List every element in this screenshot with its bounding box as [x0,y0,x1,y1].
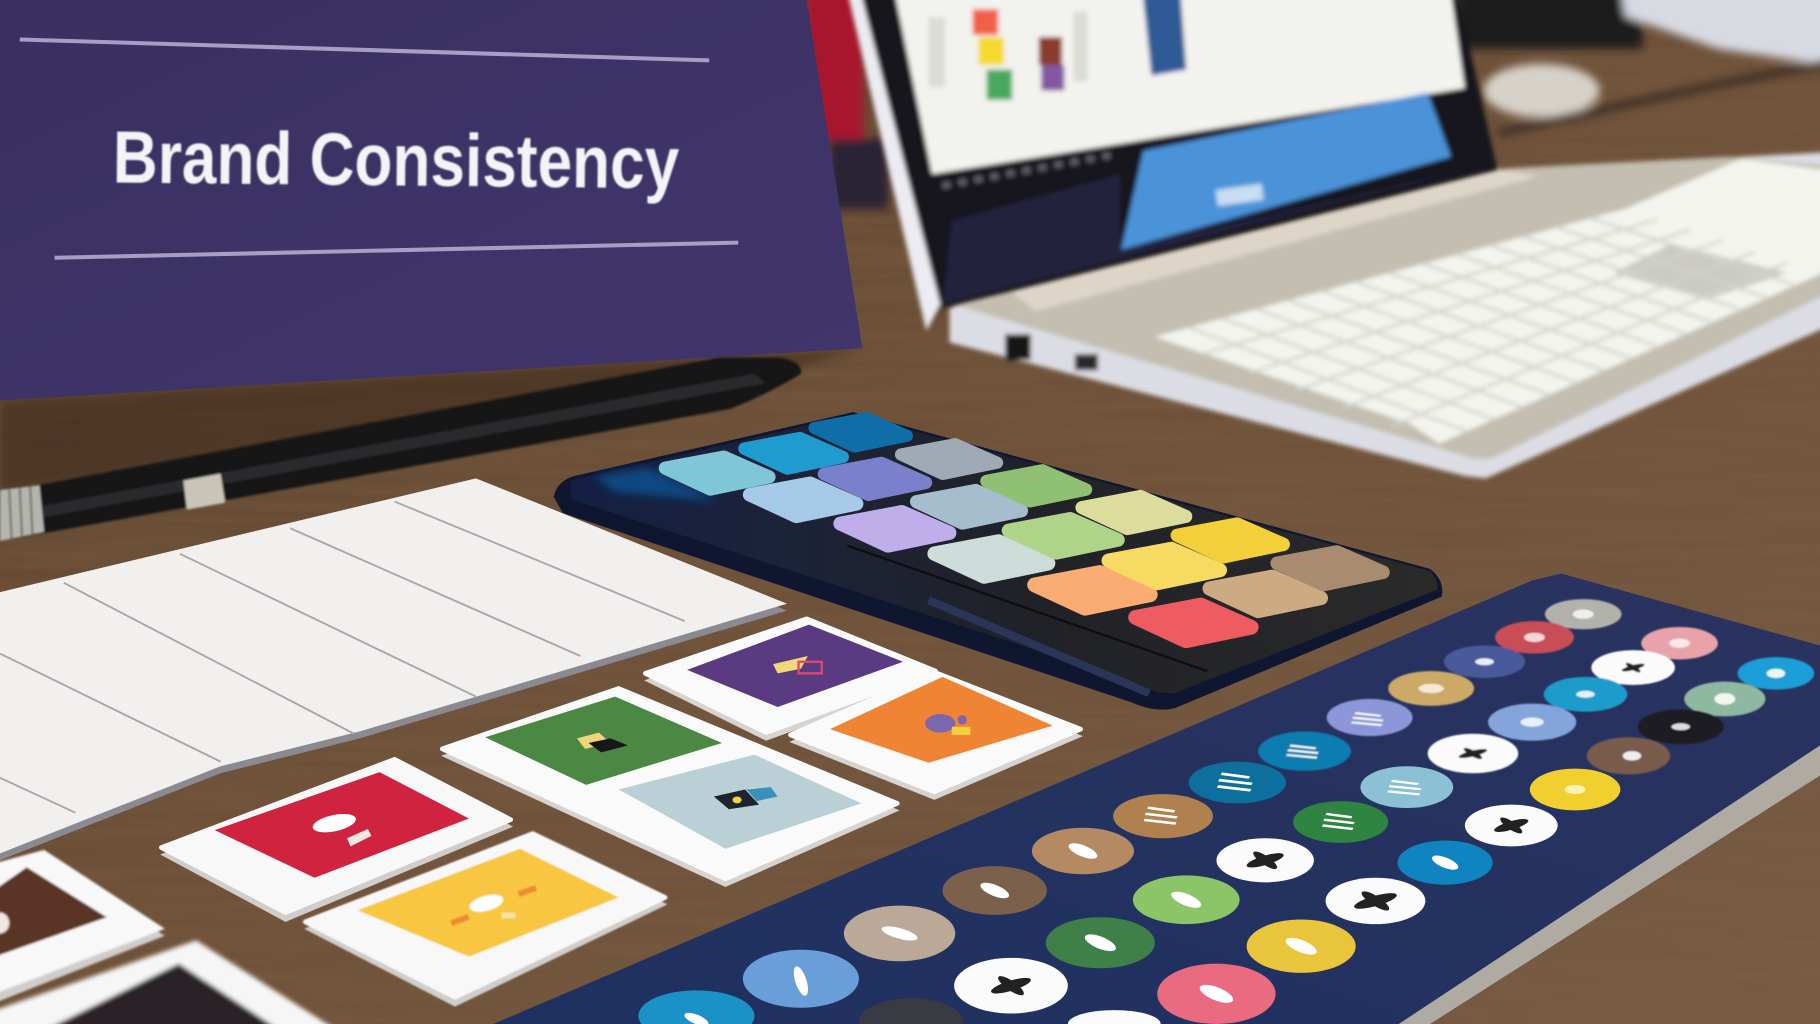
card: yellow [304,834,667,1007]
purple title panel [0,0,862,401]
pale blue swatch with icon [619,755,861,849]
colour swatches [665,418,1383,641]
card: green and pale blue [441,688,900,887]
row of icon stickers: far, softly out of focus [1258,599,1814,774]
card: red [160,759,513,922]
shadow under title panel [0,348,862,493]
keyboard keys [1155,159,1820,444]
title: Brand Consistency: Brand Consistency [112,115,680,204]
card: orange [789,672,1083,800]
card: brown, cropped at left [0,850,165,1005]
card: purple [644,619,938,741]
white folded paper sheet [0,478,787,860]
laptop base [949,151,1820,478]
laptop lid and screen [844,0,1497,331]
row of icon stickers: middle [1032,762,1620,885]
navy icon sheet [493,574,1820,1024]
palette tray [554,412,1442,710]
card: dark, cropped at bottom [0,940,360,1024]
panel rule: bottom [55,243,738,258]
green swatch with icon [485,697,722,785]
panel rule: top [20,39,709,60]
background objects behind the laptop [806,0,1820,209]
laptop [844,0,1820,478]
black pen [0,358,801,541]
row of icon stickers: near [638,866,1425,1024]
